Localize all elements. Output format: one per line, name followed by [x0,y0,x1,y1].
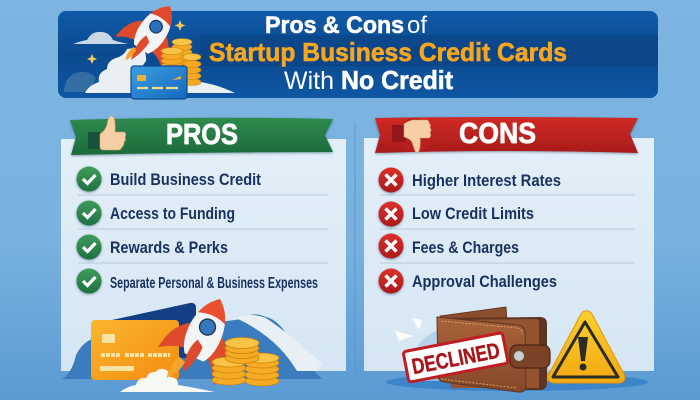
wallet clasp [510,345,550,368]
title: of [407,12,427,39]
illustration: card, rocket and coins [62,284,322,397]
centre divider [354,122,356,381]
sparks [395,318,422,341]
yellow card [91,320,179,380]
cloud smoke [120,369,215,392]
sparkles [174,20,186,31]
cloud [73,32,128,44]
icon: thumbs down [392,118,432,152]
item: fees and charges: Fees & Charges [412,238,519,257]
icon: thumbs up [88,116,126,150]
item: build business credit [76,166,261,192]
title [209,12,567,95]
title: No Credit [341,65,453,95]
item: higher interest rates: Higher Interest Rates [412,171,561,190]
item: separate expenses [76,268,318,294]
item: separate expenses: Separate Personal & Business Expenses [110,275,318,292]
item: low credit limits: Low Credit Limits [412,204,534,223]
header banner [58,0,658,99]
item: higher interest rates [378,168,561,192]
item: build business credit: Build Business Credit [110,170,261,189]
item: rewards and perks [76,234,228,260]
item: rewards and perks: Rewards & Perks [110,238,228,257]
credit card [131,66,187,99]
item: access to funding: Access to Funding [110,204,235,223]
panel: cons [364,117,654,392]
rocket [148,284,248,397]
item: approval challenges [378,268,557,294]
panel: pros [61,116,346,397]
icon: warning triangle [548,311,625,383]
ribbon: pros [70,116,333,155]
title: Startup Business Credit Cards [209,37,567,67]
title: With [284,67,334,95]
banner illustration: rocket, coins and card [64,0,235,99]
heading: pros: PROS [166,119,238,151]
declined stamp: DECLINED [410,338,502,379]
rocket [108,0,193,79]
item: access to funding [76,200,235,226]
ribbon: cons [375,117,638,153]
item: fees and charges [378,234,519,258]
cons list [378,168,635,294]
illustration: wallet, declined stamp and warning [386,307,648,392]
coins [212,338,279,386]
title: Pros & Cons [265,12,404,39]
item: low credit limits [378,202,534,226]
heading: cons: CONS [459,118,536,150]
item: approval challenges: Approval Challenges [412,272,557,291]
coins [161,38,201,86]
pros list [76,166,328,294]
wallet [437,307,550,392]
